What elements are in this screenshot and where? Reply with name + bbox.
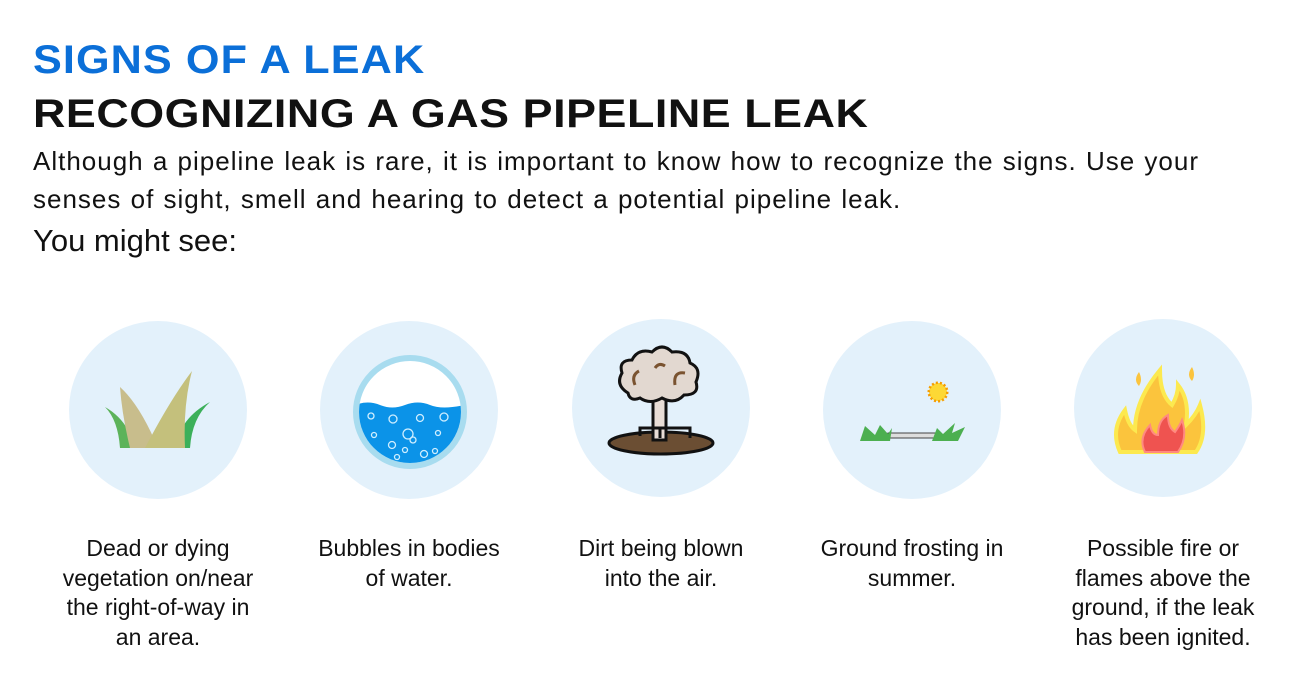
intro paragraph: senses of sight, smell and hearing to detect a potential pipeline leak. [33, 184, 901, 214]
icon circle: fire [1074, 319, 1252, 497]
intro paragraph [33, 146, 1199, 214]
icon circle: dirt [572, 319, 750, 497]
icon: fire [1116, 367, 1203, 452]
caption: vegetation: Dead or dying vegetation on/near the right-of-way in an area. [63, 535, 253, 650]
icons [105, 345, 1206, 469]
icon circle: frost [823, 321, 1001, 499]
icon: dirt blown [609, 347, 713, 454]
title: SIGNS OF A LEAK [33, 38, 425, 82]
subtitle heading: RECOGNIZING A GAS PIPELINE LEAK [33, 92, 868, 136]
icon: ground frost with sun [860, 383, 965, 441]
caption: frost: Ground frosting in summer. [821, 535, 1003, 590]
icon: dying grass [105, 371, 210, 448]
icon circle: vegetation [69, 321, 247, 499]
caption: water: Bubbles in bodies of water. [318, 535, 500, 590]
icon circle: water [320, 321, 498, 499]
icon: bubbles water [355, 358, 465, 470]
intro paragraph: Although a pipeline leak is rare, it is important to know how to recognize the signs. Use your [33, 146, 1199, 176]
section heading: You might see: [33, 223, 237, 258]
caption: fire: Possible fire or flames above the ground, if the leak has been ignited. [1072, 535, 1254, 650]
caption: dirt: Dirt being blown into the air. [579, 535, 743, 590]
